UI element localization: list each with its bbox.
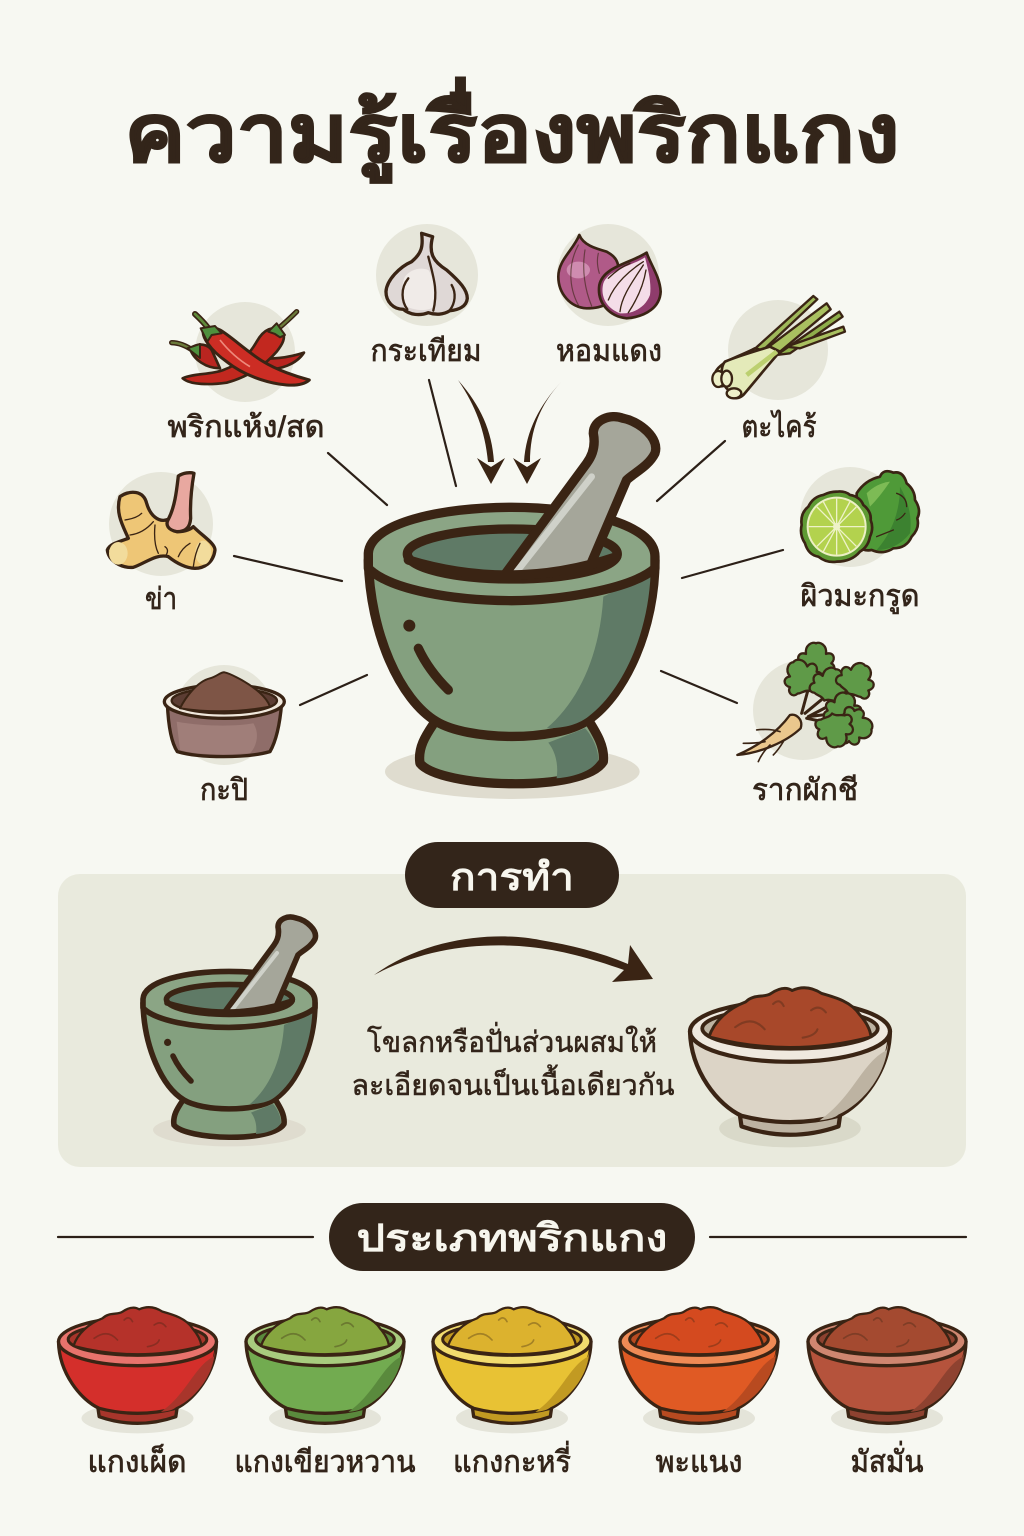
ingredient: galangal [107, 472, 215, 576]
label: chili: พริกแห้ง/สด [168, 411, 324, 444]
bowl: green curry [246, 1307, 404, 1433]
process bowl with paste [690, 988, 890, 1147]
label: green curry: แกงเขียวหวาน [234, 1446, 416, 1479]
ingredient: shallot [557, 224, 661, 326]
bowl: red curry [59, 1307, 216, 1433]
heading pill: paste types: ประเภทพริกแกง [356, 1218, 668, 1260]
label: panang curry: พะแนง [656, 1446, 742, 1479]
label: shrimp paste: กะปิ [200, 774, 248, 807]
label: garlic: กระเทียม [370, 335, 482, 368]
ingredient: lemongrass [712, 296, 845, 400]
process mortar [143, 917, 315, 1146]
heading pill: process [405, 842, 619, 908]
label: red curry: แกงเผ็ด [88, 1443, 186, 1479]
arrow: garlic to mortar [458, 380, 505, 484]
heading pill: paste types [329, 1203, 695, 1271]
ingredient: kaffir lime [800, 467, 919, 567]
ingredient: shrimp paste [164, 665, 284, 765]
ingredient: coriander root [737, 643, 881, 762]
bowl: massaman curry [808, 1307, 966, 1433]
process description: โขลกหรือปั่นส่วนผสมให้ [367, 1022, 657, 1059]
label: coriander root: รากผักชี [752, 774, 858, 807]
bowl: panang curry [620, 1307, 778, 1433]
panel: process [58, 874, 966, 1167]
label: massaman curry: มัสมั่น [850, 1441, 924, 1479]
title: ความรู้เรื่องพริกแกง [124, 77, 900, 184]
label: yellow curry: แกงกะหรี่ [453, 1441, 571, 1479]
process arrow [374, 936, 653, 982]
process description: ละเอียดจนเป็นเนื้อเดียวกัน [352, 1064, 675, 1102]
section divider lines [58, 1236, 966, 1238]
ingredient: garlic [376, 224, 478, 326]
arrow: shallot to mortar [513, 382, 561, 484]
heading pill: process: การทำ [450, 857, 574, 899]
process description [352, 1022, 675, 1102]
label: shallot: หอมแดง [556, 335, 662, 368]
main mortar and pestle [368, 417, 656, 799]
connector lines to mortar [234, 380, 783, 705]
label: kaffir lime zest: ผิวมะกรูด [800, 580, 920, 614]
bowl: yellow curry [433, 1307, 591, 1433]
label: lemongrass: ตะไคร้ [742, 409, 816, 444]
ingredient: chili [172, 302, 309, 402]
label: galangal: ข่า [145, 583, 177, 616]
